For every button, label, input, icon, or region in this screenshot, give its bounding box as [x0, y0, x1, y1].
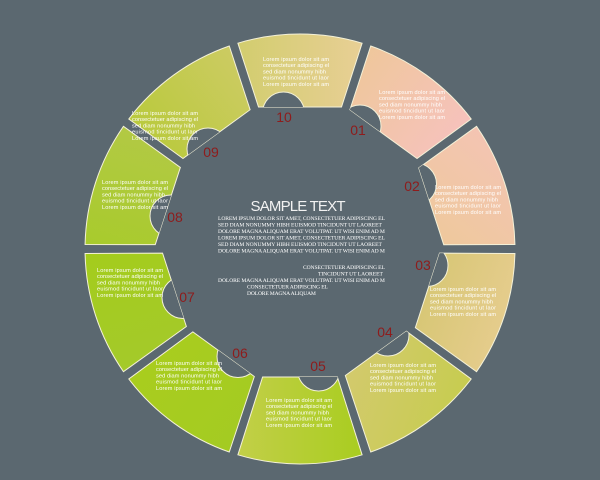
center paragraph: TINCIDUNT UT LAOREET — [318, 272, 383, 278]
segment 05 — [238, 377, 362, 464]
text 04: Lorem ipsum dolor sit am — [370, 388, 436, 394]
text 05: Lorem ipsum dolor sit am — [266, 423, 332, 429]
text 08: sed diam nonummy hibh — [102, 192, 165, 198]
segment 04 — [326, 317, 477, 459]
text 03: sed diam nonummy hibh — [430, 299, 493, 305]
text 05: sed diam nonummy hibh — [266, 410, 329, 416]
text 07: Lorem ipsum dolor sit am — [97, 293, 163, 299]
center paragraph: DOLORE MAGNA ALIQUAM ERAT VOLUTPAT. UT WISI ENIM AD M — [218, 248, 385, 254]
numbers: 10 — [276, 109, 292, 125]
text 05: euismod tincidunt ut laor — [266, 417, 332, 423]
numbers: 01 — [350, 122, 366, 138]
center paragraph: SED DIAM NONUMMY HIBH EUISMOD TINCIDUNT UT LAOREET — [218, 222, 382, 228]
text 04: sed diam nonummy hibh — [370, 375, 433, 381]
center paragraph: DOLORE MAGNA ALIQUAM ERAT VOLUTPAT. UT WISI ENIM AD M — [218, 278, 385, 284]
numbers: 02 — [404, 178, 420, 194]
numbers: 03 — [415, 257, 431, 273]
text 01: sed diam nonummy hibh — [379, 102, 442, 108]
text 02: consectetuer adipiscing el — [435, 191, 501, 197]
segment 06 — [123, 318, 274, 459]
text 07: euismod tincidunt ut laor — [97, 287, 163, 293]
text 05: Lorem ipsum dolor sit am — [266, 398, 332, 404]
text 01: Lorem ipsum dolor sit am — [379, 115, 445, 121]
text 10: consectetuer adipiscing el — [263, 63, 329, 69]
numbers: 06 — [232, 345, 248, 361]
text 08: Lorem ipsum dolor sit am — [102, 205, 168, 211]
text 06: sed diam nonummy hibh — [156, 373, 219, 379]
notches — [150, 92, 448, 391]
segment 10 — [238, 34, 362, 107]
text 08: euismod tincidunt ut laor — [102, 199, 168, 205]
text 09: Lorem ipsum dolor sit am — [132, 111, 198, 117]
numbers: 09 — [203, 144, 219, 160]
text 02: euismod tincidunt ut laor — [435, 204, 501, 210]
text 01: euismod tincidunt ut laor — [379, 109, 445, 115]
text 01: Lorem ipsum dolor sit am — [379, 90, 445, 96]
text 03: consectetuer adipiscing el — [430, 293, 496, 299]
text 04: Lorem ipsum dolor sit am — [370, 363, 436, 369]
center paragraph: DOLORE MAGNA ALIQUAM — [247, 291, 316, 297]
segment 02 — [412, 124, 524, 265]
text 10: Lorem ipsum dolor sit am — [263, 57, 329, 63]
text 09: euismod tincidunt ut laor — [132, 130, 198, 136]
numbers: 04 — [377, 324, 393, 340]
text 09: sed diam nonummy hibh — [132, 123, 195, 129]
text 06: euismod tincidunt ut laor — [156, 380, 222, 386]
center paragraph: LOREM IPSUM DOLOR SIT AMET, CONSECTETUER ADIPISCING EL — [218, 236, 385, 242]
center paragraph: CONSECTETUER ADIPISCING EL — [303, 265, 385, 271]
numbers: 07 — [179, 289, 195, 305]
center paragraph — [218, 216, 385, 297]
center paragraph: SED DIAM NONUMMY HIBH EUISMOD TINCIDUNT UT LAOREET — [218, 242, 382, 248]
segment 07 — [76, 231, 194, 374]
center paragraph: CONSECTETUER ADIPISCING EL — [247, 284, 328, 290]
numbers: 05 — [310, 358, 326, 374]
center title: SAMPLE TEXT — [250, 198, 346, 215]
text 10: sed diam nonummy hibh — [263, 69, 326, 75]
text 02: Lorem ipsum dolor sit am — [435, 185, 501, 191]
text 10: Lorem ipsum dolor sit am — [263, 82, 329, 88]
text 07: consectetuer adipiscing el — [97, 274, 163, 280]
text 10: euismod tincidunt ut laor — [263, 76, 329, 82]
segment 08 — [76, 124, 187, 265]
text 09: consectetuer adipiscing el — [132, 117, 198, 123]
text 04: consectetuer adipiscing el — [370, 369, 436, 375]
text 03: Lorem ipsum dolor sit am — [430, 287, 496, 293]
text 04: euismod tincidunt ut laor — [370, 382, 436, 388]
text 08: Lorem ipsum dolor sit am — [102, 180, 168, 186]
text 06: Lorem ipsum dolor sit am — [156, 386, 222, 392]
text 03: euismod tincidunt ut laor — [430, 306, 496, 312]
text 06: Lorem ipsum dolor sit am — [156, 361, 222, 367]
numbers: 08 — [167, 209, 183, 225]
text 01: consectetuer adipiscing el — [379, 96, 445, 102]
text 05: consectetuer adipiscing el — [266, 404, 332, 410]
text 02: sed diam nonummy hibh — [435, 197, 498, 203]
center paragraph: LOREM IPSUM DOLOR SIT AMET, CONSECTETUER ADIPISCING EL — [218, 216, 385, 222]
segment 09 — [123, 39, 267, 171]
text 02: Lorem ipsum dolor sit am — [435, 210, 501, 216]
ring of segments — [76, 34, 524, 464]
segment 01 — [333, 39, 477, 171]
text 06: consectetuer adipiscing el — [156, 367, 222, 373]
text 07: sed diam nonummy hibh — [97, 280, 160, 286]
text 09: Lorem ipsum dolor sit am — [132, 136, 198, 142]
segment 03 — [408, 231, 524, 374]
center paragraph: DOLORE MAGNA ALIQUAM ERAT VOLUTPAT. UT WISI ENIM AD M — [218, 229, 385, 235]
numbers — [167, 109, 431, 374]
text 08: consectetuer adipiscing el — [102, 186, 168, 192]
text 03: Lorem ipsum dolor sit am — [430, 312, 496, 318]
text 07: Lorem ipsum dolor sit am — [97, 268, 163, 274]
segment texts — [97, 57, 501, 429]
